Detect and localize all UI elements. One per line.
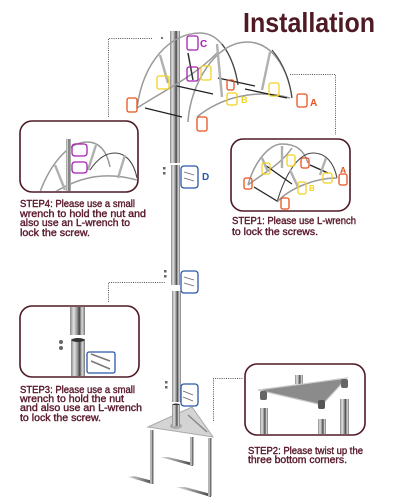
callout box D: upper screws bbox=[181, 166, 209, 188]
text: step 1: STEP1: Please use L-wrench bbox=[232, 215, 356, 227]
panel: step 2 bbox=[245, 364, 365, 435]
callout boxes: B yellow: B bbox=[241, 95, 248, 105]
panel: step 4 bbox=[20, 121, 138, 192]
callout boxes: A orange: A bbox=[310, 98, 317, 109]
step 2 base detail bbox=[258, 375, 349, 435]
callout box: lower screws bbox=[181, 384, 198, 406]
step 3 pole joint detail bbox=[59, 306, 115, 377]
callout boxes: C purple: C bbox=[200, 39, 207, 50]
callout boxes: A orange bbox=[127, 80, 317, 131]
text: step 3: and also use an L-wrench bbox=[20, 402, 142, 414]
callout boxes: C purple bbox=[187, 36, 207, 81]
title: Installation bbox=[243, 7, 375, 38]
text: step 3: STEP3: Please use a small bbox=[20, 384, 135, 396]
dotted leader: step 1 bbox=[290, 74, 336, 135]
text: step 4: lock the screw. bbox=[20, 227, 90, 239]
hose hanger hoops bbox=[137, 33, 292, 122]
text: step 2: STEP2: Please twist up the bbox=[248, 445, 363, 457]
triangular base with ground stakes bbox=[128, 405, 213, 497]
assembled pole bbox=[161, 31, 181, 427]
text: step 4: also use an L-wrench to bbox=[20, 217, 130, 229]
step 1 hanger detail: B bbox=[309, 184, 315, 193]
panel: step 1 bbox=[231, 139, 350, 211]
step 1 hanger detail: A bbox=[340, 165, 346, 175]
text: step 4: wrench to hold the nut and bbox=[19, 208, 146, 220]
callout box D: upper screws: D bbox=[202, 172, 209, 183]
step 1 hanger detail bbox=[244, 144, 347, 209]
panel: step 3 bbox=[20, 306, 139, 377]
dotted leader: step 4 bbox=[108, 38, 152, 117]
dotted leader: step 2 bbox=[214, 378, 243, 421]
step 4 hanger detail bbox=[40, 139, 137, 192]
text: step 3: to lock the screw. bbox=[20, 412, 101, 424]
text: step 3: wrench to hold the nut bbox=[19, 393, 124, 405]
callout box: middle screws bbox=[181, 271, 198, 293]
text: step 4: STEP4: Please use a small bbox=[20, 198, 135, 210]
dotted leader: step 3 bbox=[108, 282, 165, 302]
text: step 2: three bottom corners. bbox=[248, 454, 347, 466]
text: step 1: to lock the screws. bbox=[232, 226, 318, 238]
callout boxes: B yellow bbox=[157, 66, 279, 105]
